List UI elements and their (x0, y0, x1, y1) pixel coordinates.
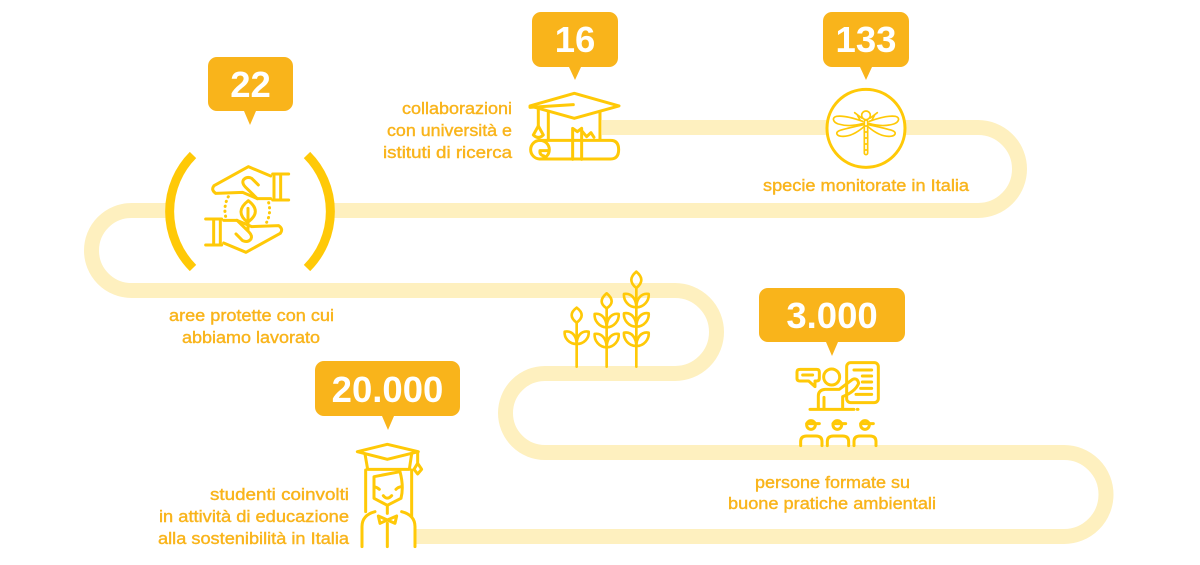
bubble: 16 (532, 12, 618, 80)
winding path (92, 128, 1106, 536)
label: specie monitorate: specie monitorate in Italia (763, 177, 970, 195)
step: persone formate (728, 288, 936, 513)
icon: graduate student (357, 444, 422, 547)
bubble: 133 (823, 12, 909, 80)
icon: graduation cap and diploma (530, 93, 619, 159)
bubble: 20.000: 20.000 (332, 369, 443, 410)
step: studenti coinvolti (158, 361, 460, 548)
icon: hands holding a plant (170, 150, 331, 272)
bubble: 20.000 (315, 361, 460, 430)
label: persone formate: buone pratiche ambientali (728, 495, 936, 513)
bubble: 16: 16 (555, 19, 595, 60)
label: studenti coinvolti: in attività di educazione (159, 508, 349, 526)
bubble: 22: 22 (230, 64, 271, 105)
bubble: 22 (208, 57, 293, 125)
label: persone formate (728, 474, 936, 513)
label: collaborazioni: collaborazioni (402, 100, 512, 118)
step: aree protette (169, 57, 334, 347)
label: studenti coinvolti: alla sostenibilità in Italia (158, 530, 350, 548)
label: aree protette: abbiamo lavorato (182, 329, 320, 347)
label: collaborazioni: istituti di ricerca (383, 144, 513, 162)
bubble: 133: 133 (836, 19, 896, 60)
step: collaborazioni (383, 12, 619, 162)
label: collaborazioni: con università e (387, 122, 512, 140)
bubble: 3.000 (759, 288, 905, 356)
label: aree protette (169, 307, 334, 347)
step: specie monitorate (763, 12, 970, 195)
bubble: 3.000: 3.000 (786, 295, 878, 336)
label: persone formate: persone formate su (755, 474, 910, 492)
icon: wheat (565, 272, 649, 367)
icon: dragonfly (827, 89, 905, 167)
label: aree protette: aree protette con cui (169, 307, 334, 325)
label: collaborazioni (383, 100, 513, 162)
icon: teacher with students (797, 363, 878, 446)
label: studenti coinvolti: studenti coinvolti (210, 486, 349, 504)
label: studenti coinvolti (158, 486, 350, 548)
